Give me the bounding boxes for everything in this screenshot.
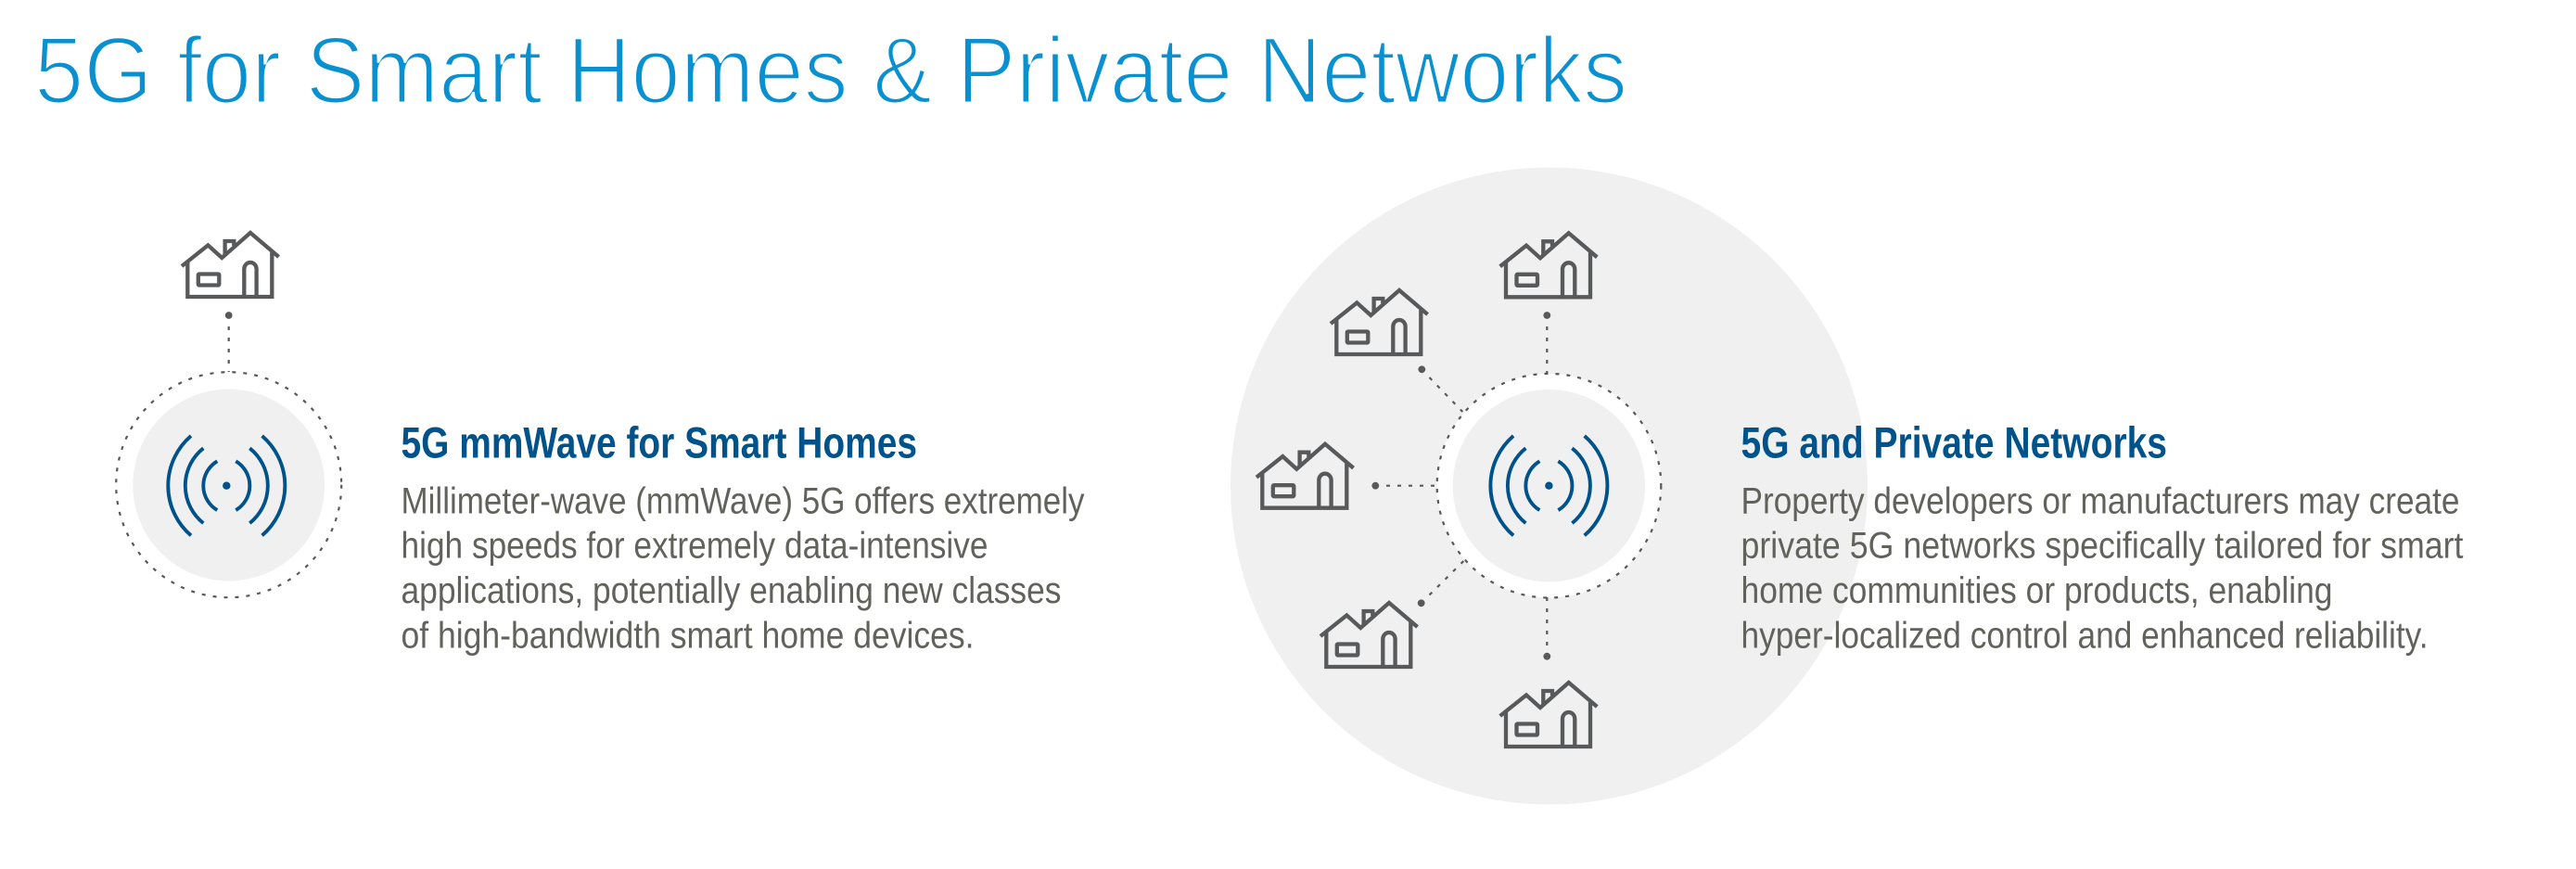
heading: 5G and Private Networks: 5G and Private Networks: [1741, 417, 2167, 467]
text block: mmWave description: of high-bandwidth smart home devices.: [401, 615, 974, 656]
text block: private networks description: Property developers or manufacturers may create: [1741, 480, 2459, 521]
text block: private networks description: hyper-localized control and enhanced reliability.: [1741, 615, 2428, 656]
panel: 5G and Private Networks: [1231, 167, 2463, 805]
icon: house top: [1500, 233, 1597, 297]
text block: private networks description: private 5G networks specifically tailored for smart: [1741, 526, 2463, 567]
connector: top: [1543, 312, 1550, 374]
icon: house bottom: [1500, 683, 1597, 747]
text block: mmWave description: Millimeter-wave (mmWave) 5G offers extremely: [401, 480, 1085, 521]
connector: bottom: [1543, 597, 1550, 660]
text block: private networks description: [1741, 480, 2463, 656]
background circle: [1231, 167, 1868, 805]
icon: antenna with dotted ring: [116, 372, 341, 597]
icon: house left: [1256, 444, 1354, 508]
connector: house to antenna: [225, 312, 233, 372]
connector: lower left: [1418, 561, 1463, 607]
panel: 5G mmWave for Smart Homes: [116, 233, 1085, 656]
connector: left: [1371, 482, 1436, 490]
text block: mmWave description: high speeds for extremely data-intensive: [401, 526, 988, 567]
icon: house upper left: [1331, 290, 1428, 354]
text block: mmWave description: [401, 480, 1085, 656]
text block: private networks description: home communities or products, enabling: [1741, 570, 2333, 611]
heading: 5G mmWave for Smart Homes: 5G mmWave for Smart Homes: [401, 417, 917, 467]
connector: upper left: [1418, 365, 1462, 412]
title: 5G for Smart Homes & Private Networks: [34, 18, 1627, 123]
hub: antenna with dotted ring: [1437, 374, 1661, 597]
text block: mmWave description: applications, potentially enabling new classes: [401, 570, 1061, 611]
icon: house: [182, 233, 279, 297]
icon: house lower left: [1320, 603, 1418, 667]
